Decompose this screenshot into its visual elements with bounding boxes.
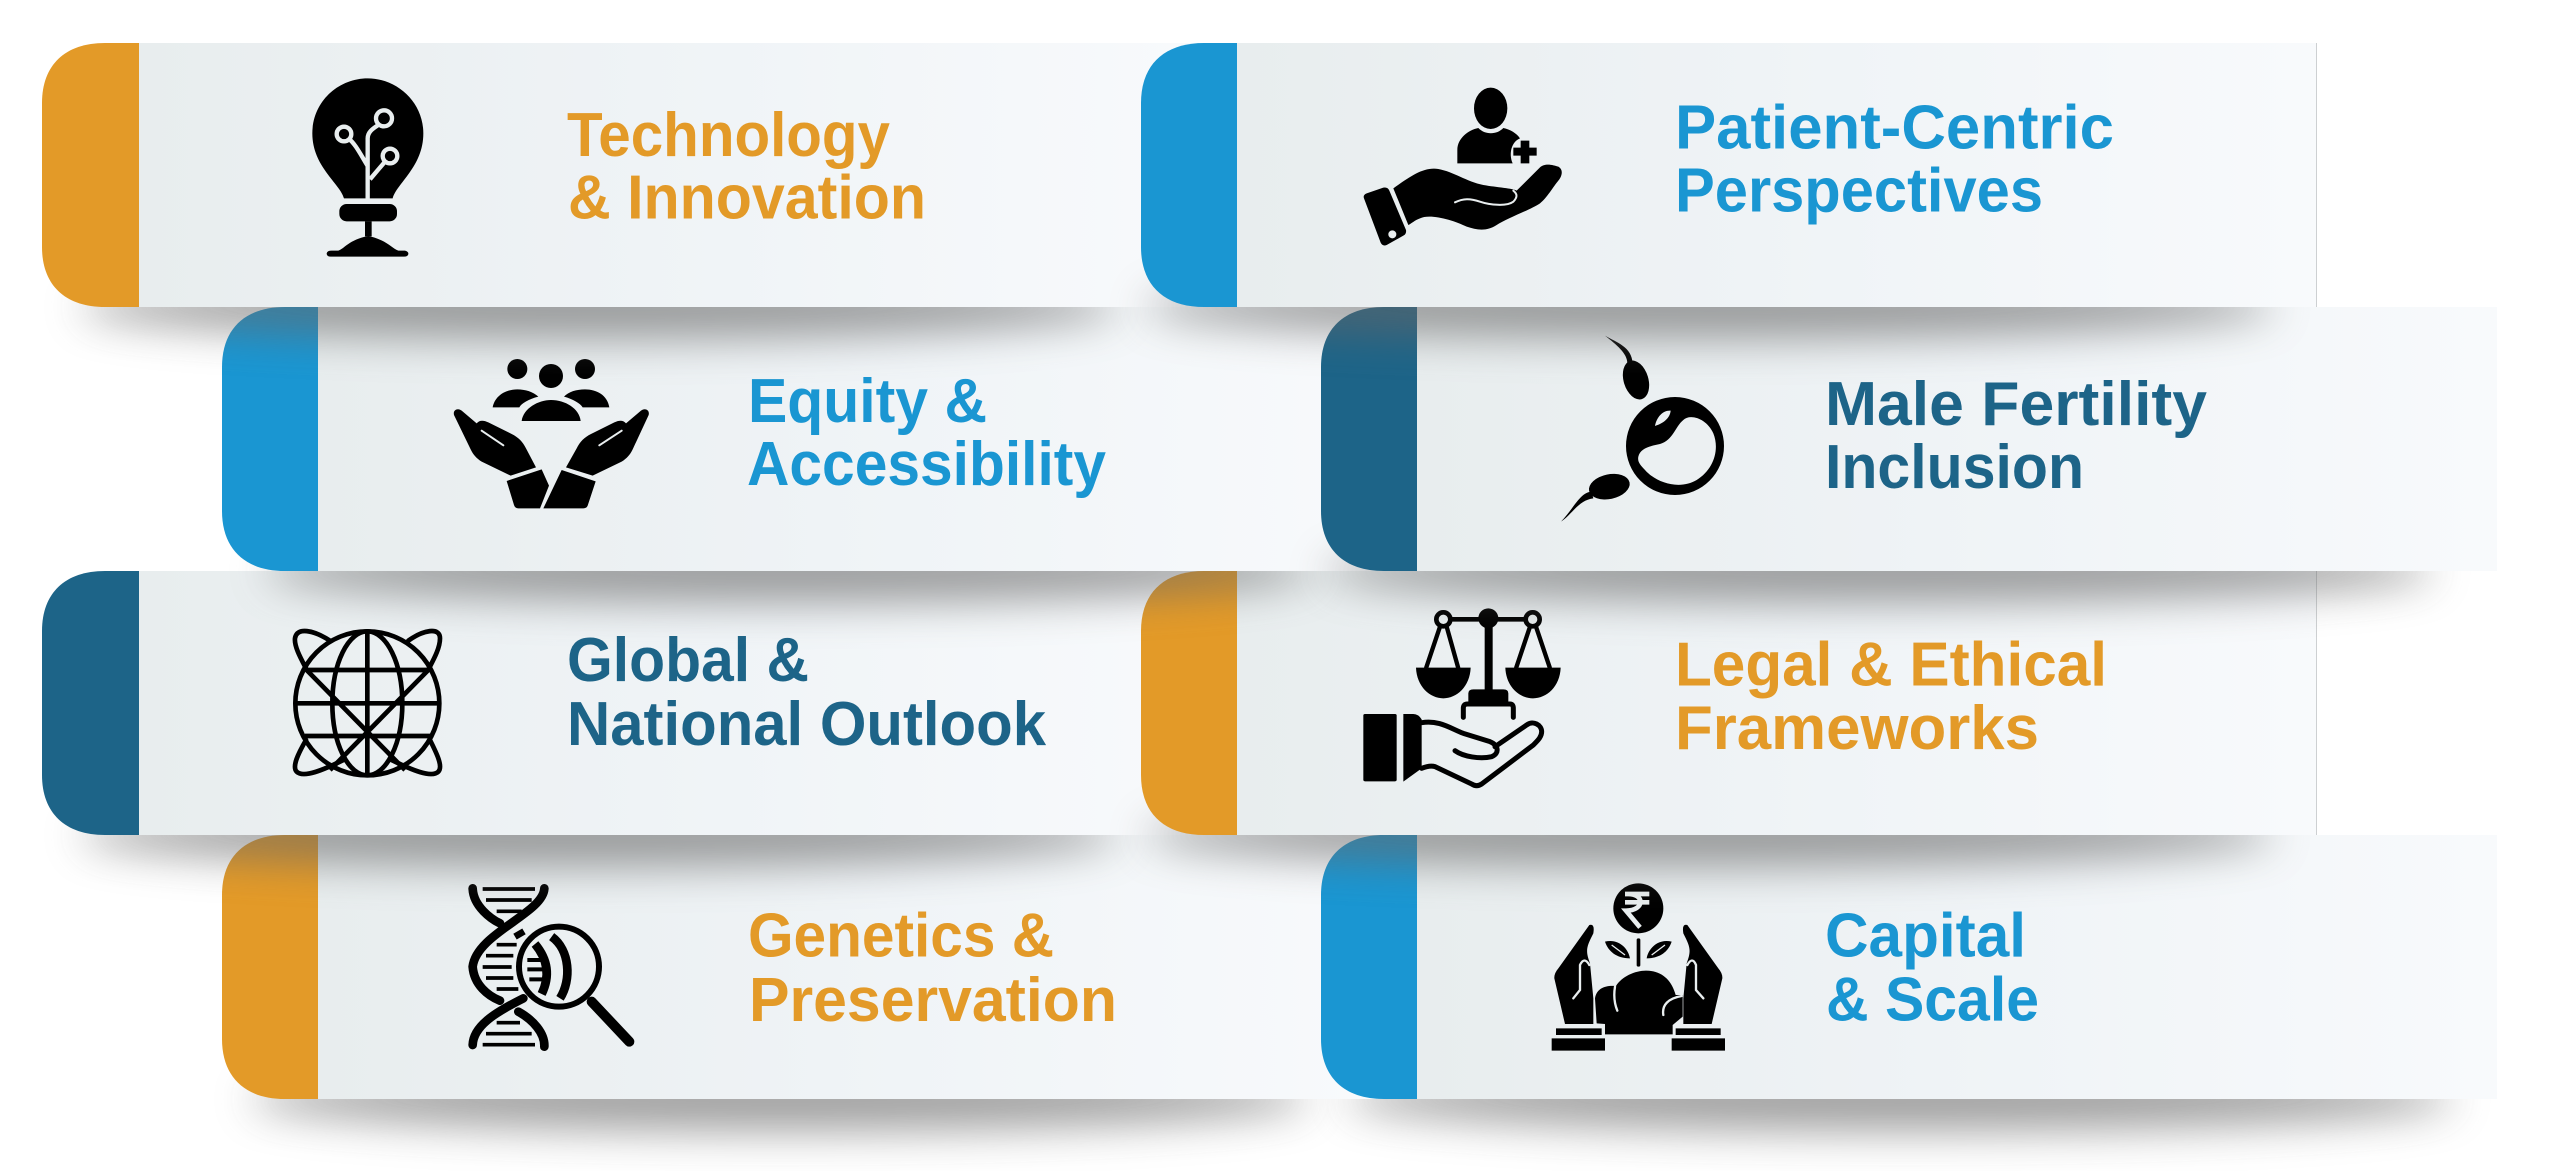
- label: Legal & Ethical Frameworks: Frameworks: [1675, 694, 2039, 763]
- label: Capital & Scale: [1825, 902, 2039, 1034]
- panel: Legal & Ethical Frameworks: [1141, 571, 2317, 835]
- label: Patient-Centric Perspectives: Perspectives: [1675, 156, 2043, 226]
- icon: DNA with magnifier: [473, 888, 629, 1047]
- icon: globe: [295, 631, 440, 776]
- panel: Genetics & Preservation: [222, 835, 1378, 1099]
- label: Equity & Accessibility: Accessibility: [747, 430, 1106, 499]
- label: Global & National Outlook: Global &: [567, 626, 809, 695]
- icon: light bulb: [312, 78, 423, 257]
- label: Male Fertility Inclusion: Male Fertility: [1825, 370, 2208, 439]
- label: Capital & Scale: Capital: [1825, 902, 2026, 970]
- panel: Equity & Accessibility: [222, 307, 1378, 571]
- tab: teal: [1321, 307, 1417, 571]
- tab: blue: [1141, 43, 1237, 307]
- label: Genetics & Preservation: Preservation: [749, 966, 1117, 1035]
- icon: hand holding patient: [1364, 88, 1562, 245]
- tab: teal: [42, 571, 139, 835]
- tab: blue: [1321, 835, 1417, 1099]
- label: Patient-Centric Perspectives: [1675, 94, 2114, 226]
- label: Genetics & Preservation: Genetics &: [748, 902, 1054, 970]
- label: Technology & Innovation: Technology: [567, 101, 890, 170]
- icon: hands, plant and rupee coin: [1552, 883, 1725, 1051]
- label: Male Fertility Inclusion: Inclusion: [1825, 433, 2084, 502]
- label: Equity & Accessibility: Equity &: [748, 367, 987, 436]
- label: Global & National Outlook: [567, 626, 1047, 759]
- icon: hands holding people: [454, 359, 649, 508]
- panel: Global & National Outlook: [42, 571, 1199, 835]
- panel: Technology & Innovation: [42, 43, 1199, 307]
- label: Technology & Innovation: [567, 101, 926, 232]
- label: Technology & Innovation: & Innovation: [568, 164, 926, 232]
- label: Genetics & Preservation: [748, 902, 1117, 1035]
- label: Patient-Centric Perspectives: Patient-Centric: [1675, 94, 2114, 162]
- panel: Capital & Scale: [1321, 835, 2497, 1099]
- panel: Patient-Centric Perspectives: [1141, 43, 2317, 307]
- tab: blue: [222, 307, 318, 571]
- label: Legal & Ethical Frameworks: [1675, 630, 2107, 763]
- panel: Male Fertility Inclusion: [1321, 307, 2497, 571]
- label: Capital & Scale: & Scale: [1826, 966, 2039, 1034]
- tab: orange: [42, 43, 139, 307]
- tab: orange: [1141, 571, 1237, 835]
- tab: orange: [222, 835, 318, 1099]
- label: Male Fertility Inclusion: [1825, 370, 2208, 502]
- label: Legal & Ethical Frameworks: Legal & Ethical: [1675, 630, 2107, 700]
- icon: sperm and egg: [1561, 336, 1724, 522]
- label: Global & National Outlook: National Outlook: [567, 690, 1047, 759]
- icon: scales on hand: [1363, 608, 1561, 786]
- label: Equity & Accessibility: [747, 367, 1106, 499]
